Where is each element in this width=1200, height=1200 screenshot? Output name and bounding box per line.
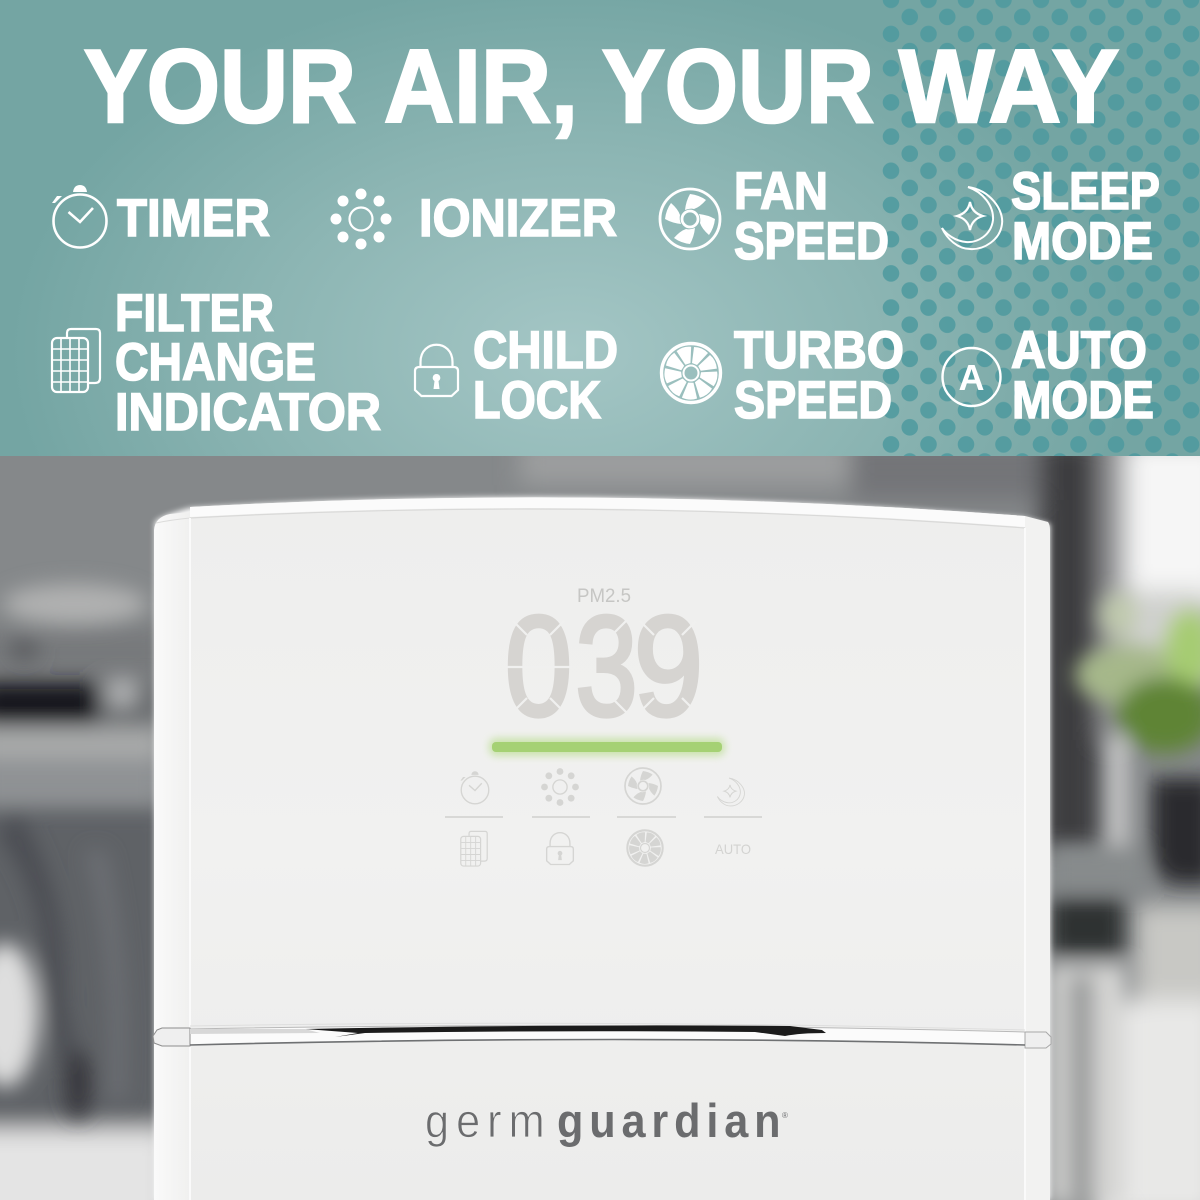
title: YOUR <box>84 29 356 145</box>
side panels <box>154 512 1050 1200</box>
feature: turbo speed <box>660 321 904 430</box>
label: sleep mode: MODE <box>1012 212 1153 271</box>
panel icon: turbo <box>626 829 663 866</box>
label: ionizer: IONIZER <box>419 189 617 248</box>
icon: timer <box>52 185 106 248</box>
feature: filter change indicator <box>52 284 381 442</box>
feature: auto mode <box>942 321 1154 430</box>
green air quality bar <box>489 738 725 756</box>
label: turbo speed: SPEED <box>734 371 892 430</box>
icon: sleep moon <box>942 187 1002 249</box>
title: WAY <box>899 29 1119 145</box>
icon: auto <box>942 348 1000 406</box>
label: child lock <box>473 321 618 430</box>
icon: lock <box>415 345 458 396</box>
halo <box>155 497 1050 1200</box>
feature: child lock <box>415 321 618 430</box>
panel icon: filter <box>461 831 487 866</box>
brand logo: germguardian <box>425 1094 788 1147</box>
panel icon: timer <box>460 771 489 804</box>
panel icon: sleep <box>717 778 744 806</box>
label: filter change indicator <box>115 284 381 442</box>
label: fan speed <box>734 162 889 271</box>
digital display 039: 9 <box>634 587 703 746</box>
air purifier body <box>154 497 1050 1200</box>
label: child lock: CHILD <box>473 321 618 380</box>
top edge highlight <box>190 497 1025 527</box>
feature: fan speed <box>660 162 889 271</box>
icon: turbo fan <box>660 342 721 403</box>
label: filter change indicator: CHANGE <box>115 333 316 392</box>
chrome band <box>153 1023 1051 1048</box>
label: fan speed: FAN <box>734 162 828 221</box>
label: auto mode <box>1011 321 1154 430</box>
brand logo: germguardian: germ <box>425 1094 545 1147</box>
panel icon: ionizer <box>541 768 579 806</box>
label: filter change indicator: INDICATOR <box>115 383 381 442</box>
control panel icons <box>445 768 762 866</box>
feature: sleep mode <box>942 162 1160 271</box>
feature: timer <box>52 185 270 248</box>
panel label: auto: AUTO <box>715 841 751 857</box>
digital display 039: 3 <box>576 587 638 746</box>
banner background <box>0 0 1200 456</box>
icon: fan <box>660 189 720 249</box>
title: AIR, <box>384 29 578 145</box>
brand logo: germguardian: ® <box>782 1111 788 1120</box>
panel dividers <box>445 816 762 818</box>
label: filter change indicator: FILTER <box>115 284 274 343</box>
digital display 039: 0 <box>505 587 572 746</box>
label: fan speed: SPEED <box>734 212 889 271</box>
label: auto mode: MODE <box>1012 371 1154 430</box>
label: timer: TIMER <box>117 189 270 248</box>
label: auto mode: AUTO <box>1011 321 1147 380</box>
panel icon: fan <box>625 768 661 804</box>
PM2.5 label: PM2.5 <box>577 586 631 607</box>
label: child lock: LOCK <box>473 371 601 430</box>
label: turbo speed: TURBO <box>734 321 904 380</box>
digital display 039 <box>505 587 703 746</box>
panel icon: lock <box>547 833 573 864</box>
label: sleep mode <box>1011 162 1160 271</box>
feature: ionizer <box>330 188 617 250</box>
title: YOUR <box>602 29 874 145</box>
label: turbo speed <box>734 321 904 430</box>
brand logo: germguardian: guardian <box>557 1094 781 1147</box>
icon: ionizer <box>330 188 392 250</box>
label: sleep mode: SLEEP <box>1011 162 1160 221</box>
main front panel <box>190 497 1025 1200</box>
icon: auto: A <box>958 357 984 398</box>
title <box>84 29 1119 145</box>
blurred room photo background <box>0 440 1200 1200</box>
icon: filter <box>52 329 100 392</box>
